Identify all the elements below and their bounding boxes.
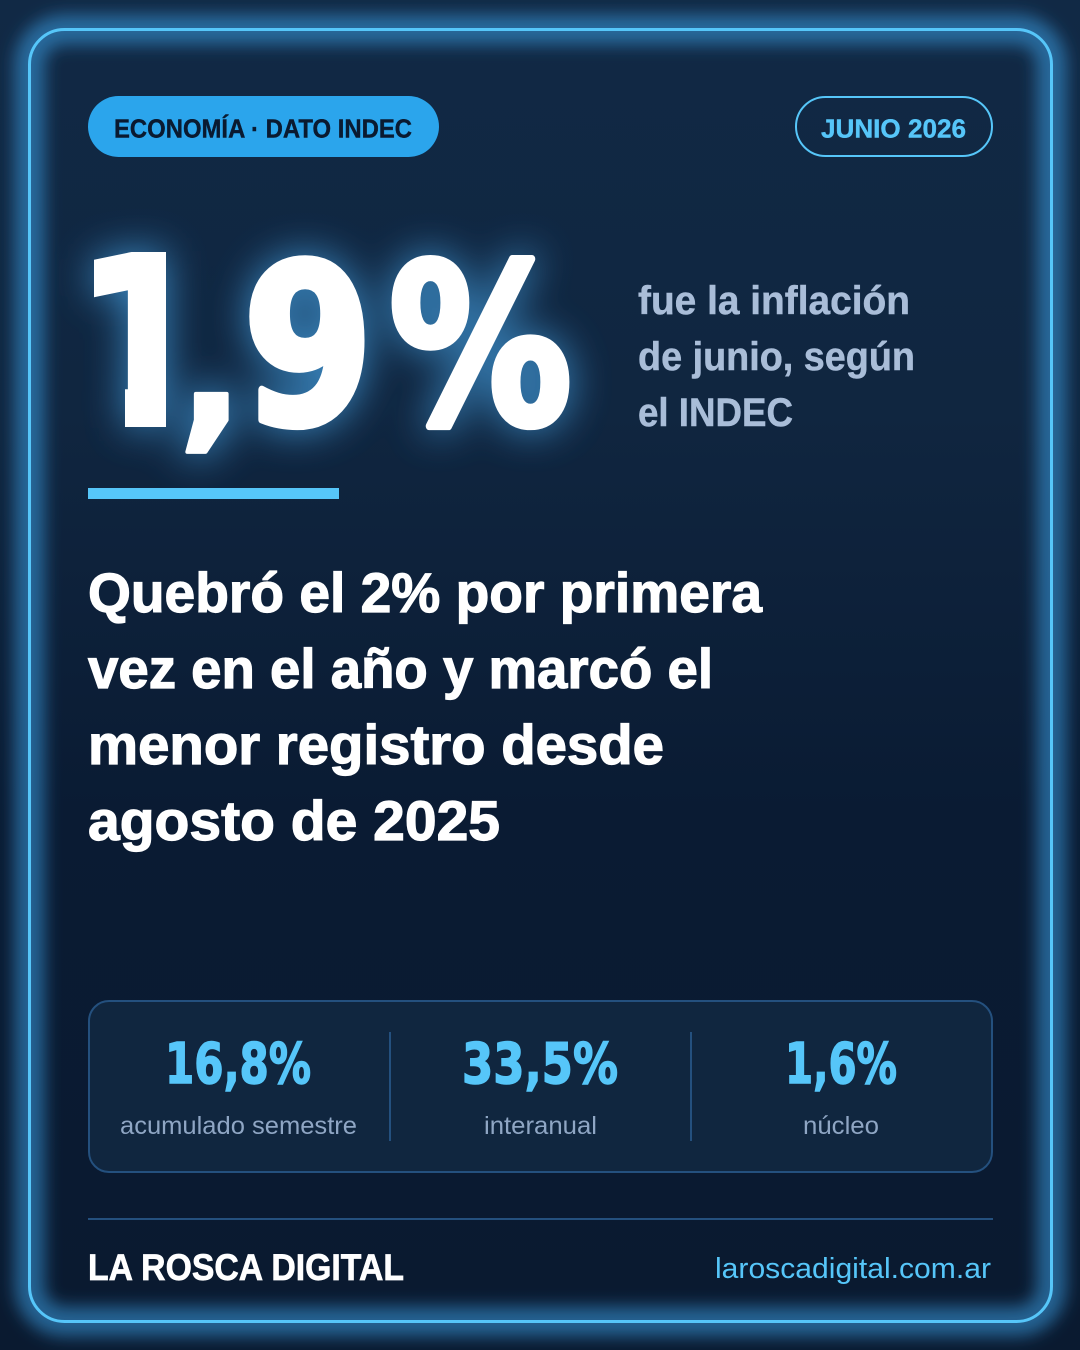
big number: 1,9%: , bbox=[178, 266, 244, 469]
big number: 1,9%: 1 bbox=[67, 211, 226, 478]
stat: year over year: interanual bbox=[484, 1112, 597, 1140]
big number caption bbox=[638, 279, 915, 435]
stat: accumulated bbox=[120, 1032, 357, 1140]
headline: vez en el año y marcó el bbox=[88, 637, 713, 700]
headline: Quebró el 2% por primera bbox=[88, 561, 763, 624]
headline: menor registro desde bbox=[88, 713, 664, 776]
footer rule bbox=[88, 1218, 993, 1220]
accent bar bbox=[88, 488, 339, 499]
category pill bbox=[88, 96, 439, 157]
headline: agosto de 2025 bbox=[88, 789, 500, 852]
big number caption: fue la inflación bbox=[638, 279, 910, 323]
stat: accumulated: acumulado semestre bbox=[120, 1112, 357, 1140]
footer brand: LA ROSCA DIGITAL bbox=[88, 1247, 404, 1288]
big number: 1,9%: 9 bbox=[243, 219, 373, 476]
footer url: laroscadigital.com.ar bbox=[715, 1253, 991, 1285]
big number: 1,9%: % bbox=[389, 218, 572, 475]
headline bbox=[88, 561, 763, 852]
big number: 1,9% bbox=[67, 211, 572, 478]
date pill bbox=[796, 97, 992, 156]
big number: 1,9%: , bbox=[178, 266, 244, 469]
stat: year over year bbox=[462, 1032, 618, 1140]
stat: core bbox=[785, 1032, 897, 1140]
big number: 1,9%: 9 bbox=[243, 219, 373, 476]
big number: 1,9%: 1 bbox=[67, 211, 226, 478]
big number caption: de junio, según bbox=[638, 335, 915, 379]
stat: core: 1,6% bbox=[785, 1032, 897, 1097]
big number: 1,9%: % bbox=[389, 218, 572, 475]
stat: accumulated: 16,8% bbox=[165, 1032, 311, 1097]
stat: year over year: 33,5% bbox=[462, 1032, 618, 1097]
stats panel bbox=[89, 1001, 992, 1172]
date pill: JUNIO 2026 bbox=[821, 114, 966, 144]
stat: core: núcleo bbox=[803, 1112, 879, 1140]
category pill: ECONOMÍA · DATO INDEC bbox=[114, 114, 412, 144]
big number caption: el INDEC bbox=[638, 391, 793, 435]
